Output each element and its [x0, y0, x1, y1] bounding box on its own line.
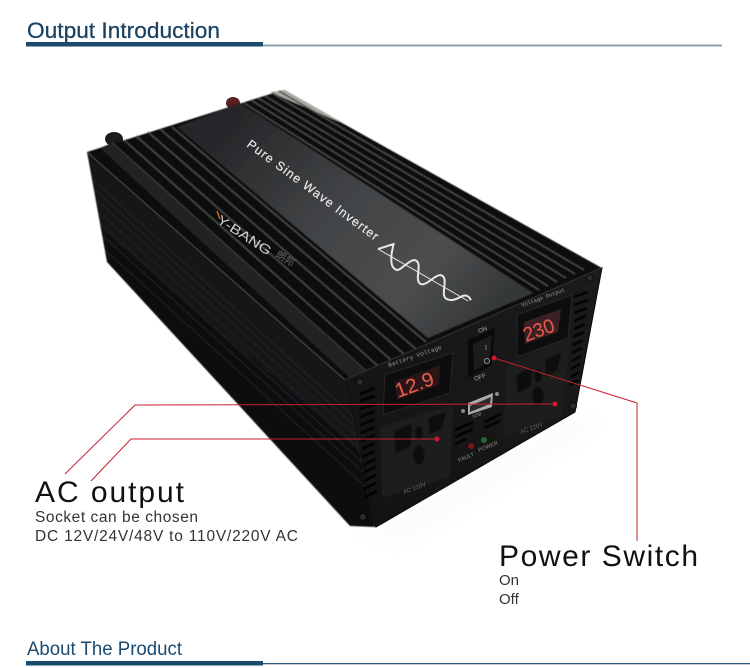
battery terminals [105, 97, 240, 146]
inverter side panel [87, 152, 376, 527]
text block: Power Switch [499, 540, 698, 608]
USB port [461, 392, 499, 419]
heading: Output Introduction: Output Introduction [27, 18, 220, 43]
text block: Power Switch: Off [499, 591, 520, 608]
inverter front panel [345, 268, 602, 527]
brand label: Y-BANG: Y-BANG [214, 212, 275, 258]
text block: AC output [35, 476, 298, 545]
top label: Pure Sine Wave Inverter: Pure Sine Wave Inverter [244, 137, 381, 243]
text block: Power Switch: On [499, 572, 519, 589]
product photo: pure sine wave inverter [87, 90, 602, 545]
right AC socket: AC 220V [520, 422, 544, 436]
icon: sine wave logo [374, 239, 476, 310]
callout line: power switch [492, 356, 637, 541]
battery voltage display [383, 344, 453, 415]
text block: Power Switch: Power Switch [499, 540, 698, 573]
status LEDs: fault and power [458, 437, 499, 464]
USB port: USB [472, 411, 482, 419]
text block: AC output: Socket can be chosen [35, 509, 198, 526]
heading: About The Product: About The Product [27, 639, 183, 660]
right AC socket [503, 337, 570, 437]
brand label: Y-BANG [214, 211, 297, 269]
heading: About The Product [26, 639, 750, 666]
battery voltage display: Battery Voltage [387, 344, 443, 369]
brand label: Y-BANG: 朗邦 [273, 248, 297, 269]
voltage output display: Voltage Output [520, 287, 566, 309]
power rocker switch [468, 326, 495, 383]
vents [360, 292, 588, 497]
panel screws [356, 274, 594, 520]
text block: AC output: DC 12V/24V/48V to 110V/220V AC [35, 528, 298, 545]
left AC socket [380, 405, 453, 498]
power rocker switch: ON [478, 326, 488, 335]
status LEDs: fault and power: FAULT [458, 452, 476, 464]
voltage output display: 230 [520, 315, 558, 347]
callout lines: AC output [65, 402, 557, 481]
status LEDs: fault and power: POWER [478, 440, 499, 454]
battery voltage display: 12.9 [392, 368, 437, 403]
left AC socket: AC 220V [403, 482, 427, 496]
voltage output display [517, 287, 572, 357]
power rocker switch: OFF [474, 373, 487, 383]
heading: Output Introduction [26, 18, 722, 46]
inverter top with fins [87, 90, 602, 380]
text block: AC output: AC output [35, 476, 185, 509]
